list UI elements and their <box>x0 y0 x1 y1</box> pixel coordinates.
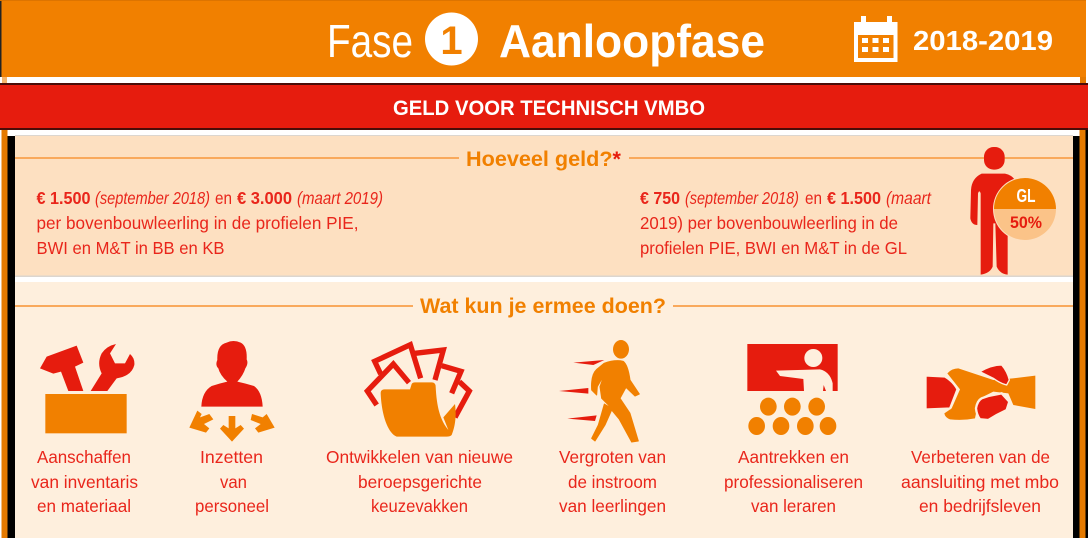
years: 2018-2019 <box>913 25 1053 56</box>
label: mbo en bedrijfsleven <box>901 447 1059 516</box>
text block: BB en KB: € 1.500 <box>36 188 91 208</box>
label: leraren <box>724 447 863 516</box>
text block: GL <box>640 188 932 258</box>
label: keuzevakken: Ontwikkelen van nieuwe <box>326 447 513 467</box>
label: leerlingen <box>559 447 666 516</box>
label: inventaris: van inventaris <box>31 472 138 492</box>
icon: number 1 circle <box>425 12 478 66</box>
label: mbo en bedrijfsleven: en bedrijfsleven <box>919 496 1041 516</box>
text block: GL: (maart <box>886 188 932 208</box>
text block: GL: (september 2018) <box>685 188 799 208</box>
icon: personnel <box>189 341 275 442</box>
heading: hoeveel geld: Hoeveel geld?* <box>466 148 622 171</box>
red banner <box>0 83 1088 130</box>
icon: walking person <box>559 340 639 442</box>
text block: GL: 2019) per bovenbouwleerling in de <box>640 213 898 233</box>
text block: BB en KB <box>36 188 383 258</box>
label: leraren: professionaliseren <box>724 472 863 492</box>
panel: hoeveel geld <box>15 135 1073 277</box>
panel: wat kun je ermee doen <box>15 282 1073 538</box>
label: keuzevakken: keuzevakken <box>371 496 468 516</box>
icon: teacher and class <box>747 344 838 435</box>
text block: BB en KB: € 3.000 <box>237 188 292 208</box>
label: leerlingen: van leerlingen <box>559 496 666 516</box>
icon: handshake <box>926 365 1035 420</box>
text block: GL: en <box>805 188 822 208</box>
label: keuzevakken <box>326 447 513 516</box>
label: leerlingen: Vergroten van <box>559 447 666 467</box>
title: Aanloopfase: Aanloopfase <box>499 15 765 67</box>
text block: BB en KB: BWI en M&T in BB en KB <box>36 238 224 258</box>
icon: number 1 circle: 1 <box>440 19 463 63</box>
text block: BB en KB: (maart 2019) <box>297 188 383 208</box>
label: inventaris <box>31 447 138 516</box>
text block: GL: € 1.500 <box>827 188 881 208</box>
label: mbo en bedrijfsleven: aansluiting met mbo <box>901 472 1059 492</box>
icon: folder with papers <box>367 345 469 437</box>
label: personeel: personeel <box>195 496 269 516</box>
label: personeel <box>195 447 269 516</box>
banner heading: GELD VOOR TECHNISCH VMBO <box>393 96 705 120</box>
icon: person with GL 50 percent <box>970 147 1057 275</box>
label: personeel: van <box>220 472 247 492</box>
50 percent label: 50% <box>1010 213 1042 232</box>
label: leerlingen: de instroom <box>568 472 657 492</box>
text block: GL: € 750 <box>640 188 680 208</box>
label: leraren: Aantrekken en <box>738 447 849 467</box>
label: personeel: Inzetten <box>200 447 263 467</box>
text block: BB en KB: en <box>215 188 232 208</box>
label: mbo en bedrijfsleven: Verbeteren van de <box>911 447 1050 467</box>
icon: toolbox <box>40 344 134 433</box>
GL label: GL <box>1016 186 1036 206</box>
icon: calendar <box>854 16 898 62</box>
header band <box>0 0 1086 77</box>
title: Fase: Fase <box>327 15 413 67</box>
text block: BB en KB: (september 2018) <box>95 188 210 208</box>
label: keuzevakken: beroepsgerichte <box>358 472 482 492</box>
text block: GL: profielen PIE, BWI en M&T in de GL <box>640 238 907 258</box>
label: leraren: van leraren <box>751 496 836 516</box>
label: inventaris: en materiaal <box>37 496 131 516</box>
heading: wat kun je ermee doen: Wat kun je ermee doen? <box>420 295 666 318</box>
text block: BB en KB: per bovenbouwleerling in de profielen PIE, <box>36 213 358 233</box>
label: inventaris: Aanschaffen <box>37 447 131 467</box>
